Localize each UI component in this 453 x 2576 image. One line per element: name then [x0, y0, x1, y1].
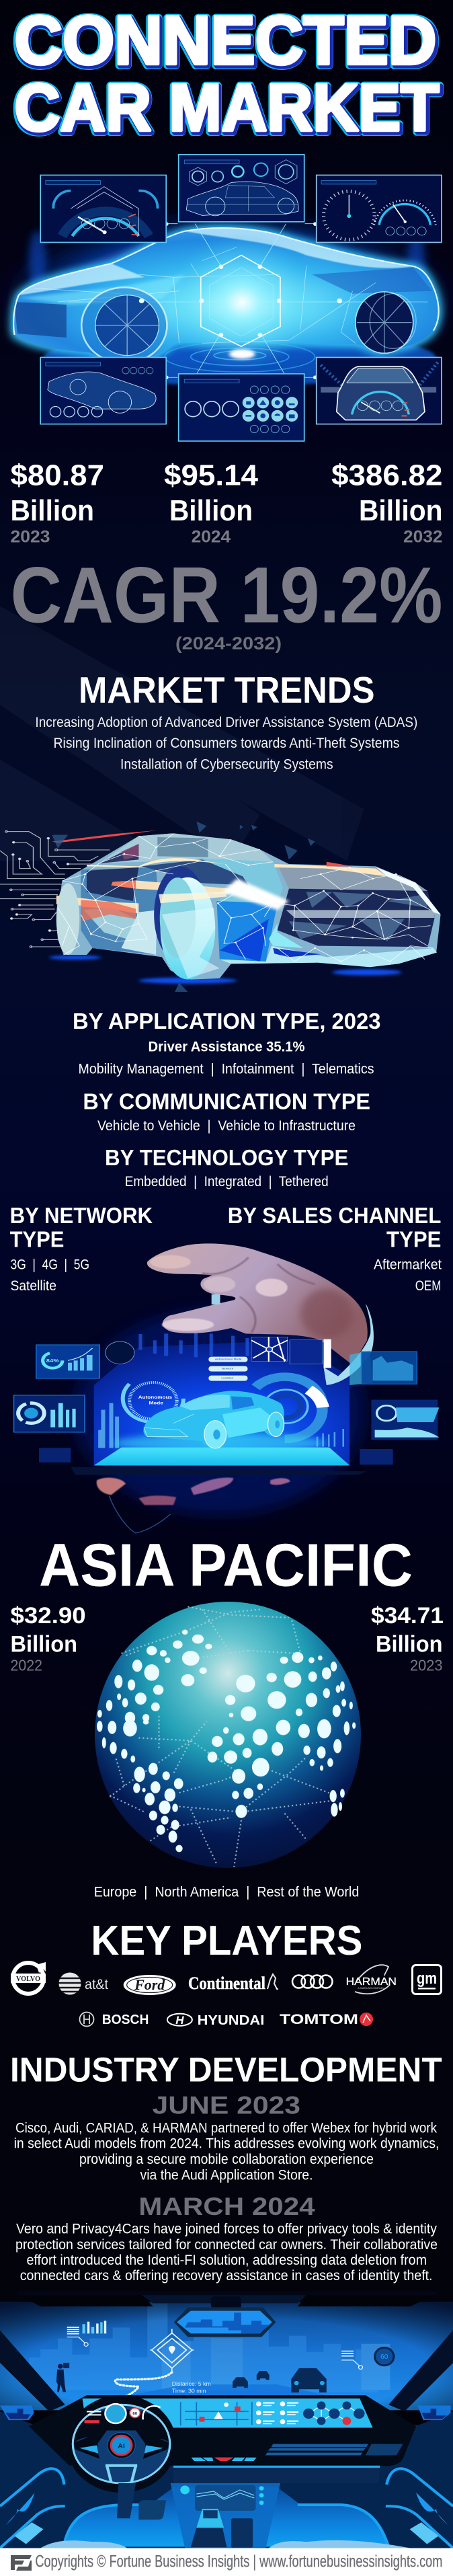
stat 2024: Billion: [169, 494, 253, 527]
segment: sales channel type: [228, 1203, 442, 1294]
car body: [56, 833, 441, 980]
hero blue glow: [0, 206, 453, 393]
small dim tiles: [39, 1448, 393, 1465]
panel: gauges top right: [317, 175, 442, 242]
Asia Pacific 2022 value: [11, 1603, 86, 1674]
segment: application type: [73, 1009, 380, 1077]
stray triangles: [52, 822, 315, 992]
bars on screen: [98, 1403, 344, 1448]
connector lines and nodes: [139, 222, 342, 379]
road: [64, 2384, 387, 2409]
bars behind hand: [138, 1333, 249, 1357]
HUD graphic: chart and note: [67, 2321, 106, 2346]
logo: Hyundai: HYUNDAI: [198, 2013, 264, 2028]
steering wheel: AI: [118, 2443, 125, 2450]
tablet edge: [71, 1467, 367, 1475]
logo: GM: [413, 1965, 441, 1994]
dial label second line: Mode: [149, 1401, 163, 1405]
lattice nodes: [83, 843, 410, 962]
market trends list: Rising Inclination of Consumers towards Anti-Theft Systems: [54, 735, 399, 751]
logo: Volvo: [11, 1962, 46, 1994]
map tile: [251, 1337, 331, 1368]
tablet cable: [110, 1496, 171, 1533]
market trends list: [35, 714, 417, 772]
cars ahead: [233, 2368, 327, 2392]
dial label: Autonomous: [138, 1395, 172, 1400]
segment: network type: Satellite: [11, 1278, 56, 1294]
segment: application type: Driver Assistance 35.1%: [148, 1039, 305, 1055]
stat 2023: [11, 459, 104, 546]
segment: network type: TYPE: [10, 1227, 64, 1252]
segment: communication type: [83, 1089, 370, 1134]
title line 2: CAR MARKET: CAR MARKET: [15, 70, 440, 145]
hologram front wheel: [81, 287, 167, 364]
segment: application type: Mobility Management | Infotainment | Telematics: [78, 1060, 374, 1077]
Asia Pacific 2023 value: [371, 1603, 444, 1674]
heading: industry development: INDUSTRY DEVELOPMENT: [10, 2051, 442, 2089]
segment: technology type: Embedded | Integrated | Tethered: [125, 1173, 329, 1189]
logo: GM: gm: [417, 1969, 437, 1988]
logo: Continental: Continental: [188, 1974, 265, 1993]
CAGR period: (2024-2032): [175, 633, 282, 654]
lower trim: [173, 2466, 380, 2483]
panel: car wireframe top centre: [179, 155, 304, 222]
logo: Ford: Ford: [134, 1976, 165, 1993]
hero illustration: holographic car with dashboards: [0, 155, 453, 441]
date: March 2024: MARCH 2024: [138, 2193, 315, 2220]
segment: network type: [10, 1203, 153, 1294]
floating card: lower right: [371, 1400, 439, 1440]
title line 2: CAR MARKET: CAR MARKET: [15, 72, 442, 147]
market trends list: Installation of Cybersecurity Systems: [120, 756, 333, 772]
floating card: top left: [36, 1345, 99, 1378]
HUD graphic: location pin: [115, 2329, 194, 2398]
floor ripple: [43, 331, 436, 386]
logo: AT&T: at&t: [85, 1977, 108, 1992]
stat 2024: $95.14: [164, 459, 259, 492]
lower fingers: [97, 1478, 290, 1505]
HUD speed sign: 60: [380, 2354, 388, 2361]
HUD route text: [172, 2380, 211, 2394]
segment: technology type: [105, 1145, 348, 1189]
front wheel: [154, 866, 226, 980]
lower cabin: [0, 2411, 453, 2548]
lower cabin glow: [64, 2487, 388, 2547]
panel: car wireframe bottom left: [40, 357, 166, 424]
panel: speedometer left: [40, 175, 166, 242]
segment: sales channel type: BY SALES CHANNEL: [228, 1203, 441, 1228]
wire lines across the hologram: [35, 247, 427, 343]
segment: technology type: BY TECHNOLOGY TYPE: [105, 1145, 348, 1170]
date: June 2023: JUNE 2023: [152, 2092, 300, 2119]
roof trim: [20, 2295, 434, 2306]
segment: network type: 3G | 4G | 5G: [11, 1256, 89, 1272]
door accents: [6, 2493, 448, 2525]
logo: Hyundai: [167, 2013, 264, 2028]
stat 2023: $80.87: [11, 459, 104, 492]
Asia Pacific 2023 value: 2023: [410, 1657, 442, 1674]
heading: market trends: MARKET TRENDS: [79, 669, 375, 711]
car on screen: [143, 1391, 284, 1448]
title line 1: CONNECTED: CONNECTED: [15, 3, 438, 80]
development text: June 2023: via the Audi Application Store.: [140, 2167, 313, 2183]
dashboard: [29, 2395, 416, 2466]
title line 1: CONNECTED: CONNECTED: [15, 4, 439, 81]
segment: sales channel type: OEM: [415, 1278, 441, 1294]
centre stack: [117, 2483, 280, 2548]
floating card: lower left: [14, 1395, 85, 1432]
steering wheel: 60: [132, 2412, 137, 2416]
market size stats: [11, 459, 442, 546]
globe dots lower: [97, 1719, 356, 1852]
steering wheel: [67, 2395, 176, 2493]
stat 2023: Billion: [11, 494, 94, 527]
stat 2032: [331, 459, 442, 546]
title line 2: CAR MARKET: CAR MARKET: [15, 71, 441, 146]
screen menu pills: [208, 1357, 247, 1381]
light streaks on car: [52, 830, 441, 914]
shirt cuff: [323, 1303, 374, 1385]
footer logo: [11, 2555, 32, 2571]
footer bar: [0, 2548, 453, 2576]
console vents: [192, 2444, 403, 2461]
gauge widget: [106, 1341, 134, 1364]
screen menu pills: Autonomous Mode: [215, 1358, 242, 1361]
Asia Pacific 2022 value: $32.90: [11, 1603, 86, 1629]
background diagonal stripes and triangles: [0, 606, 364, 861]
HUD speed sign: [341, 2347, 394, 2370]
stat 2024: 2024: [192, 527, 231, 546]
globe: [95, 1602, 361, 1868]
panel: icon grid bottom centre: [179, 374, 304, 441]
floor glow: [49, 955, 402, 984]
Asia Pacific 2023 value: Billion: [376, 1632, 442, 1657]
title line 1: CONNECTED: CONNECTED: [15, 2, 437, 79]
polygon lattice: [58, 834, 434, 962]
development text: June 2023: providing a secure mobile collaboration experience: [79, 2151, 374, 2167]
seat tops: [40, 2540, 410, 2548]
stat 2032: 2032: [403, 527, 442, 546]
stat 2032: Billion: [359, 494, 442, 527]
segment: network type: BY NETWORK: [10, 1203, 153, 1228]
logo: Bosch: BOSCH: [102, 2013, 149, 2027]
Asia Pacific 2022 value: Billion: [11, 1632, 77, 1657]
floating card: top right: [361, 1352, 417, 1384]
development text: March 2024: effort introduced the Identi-FI solution, addressing data deletion from: [27, 2252, 427, 2268]
stat 2024: [164, 459, 259, 546]
hologram car body: [13, 228, 439, 361]
segment: sales channel type: Aftermarket: [374, 1256, 442, 1272]
circuit traces: [0, 830, 110, 947]
floating card: top left: 84%: [46, 1358, 59, 1364]
segment: application type: BY APPLICATION TYPE, 2023: [73, 1009, 380, 1033]
car interior illustration: [0, 2291, 453, 2548]
development text: June 2023: [14, 2119, 439, 2183]
hand and tablet illustration: [14, 1243, 439, 1533]
title: [15, 2, 442, 147]
logo: Audi rings: [292, 1976, 332, 1988]
stat 2032: $386.82: [331, 459, 442, 492]
A pillars: [0, 2331, 453, 2411]
globe dots upper: [97, 1630, 353, 1724]
central hexagon core: [170, 233, 315, 370]
key player logos: [11, 1962, 441, 2028]
dashboard screen: [83, 2398, 373, 2427]
windscreen vignette: [0, 2302, 453, 2410]
logo: Hyundai: H: [175, 2014, 184, 2027]
pedestrian and alert: [56, 2363, 69, 2392]
other regions list: Europe | North America | Rest of the World: [94, 1883, 359, 1900]
logo: Harman: HARMAN: [346, 1976, 397, 1988]
city skyline: [29, 2303, 390, 2392]
windscreen: [0, 2302, 453, 2410]
cyan floor: [94, 1448, 349, 1465]
hologram rear wheel: [356, 292, 416, 353]
logo: AT&T: [58, 1973, 108, 1994]
segment: communication type: Vehicle to Vehicle | Vehicle to Infrastructure: [97, 1118, 356, 1134]
logo: Ford: [124, 1976, 175, 1994]
door panels: [0, 2468, 453, 2548]
HUD route text: Distance: 5 km: [172, 2380, 211, 2387]
stat 2023: 2023: [11, 527, 50, 546]
Asia Pacific 2023 value: $34.71: [371, 1603, 444, 1629]
logo: Harman: [346, 1965, 397, 1994]
logo: TomTom: [280, 2012, 373, 2027]
heading: key players: KEY PLAYERS: [91, 1918, 362, 1964]
logo: Harman: A SAMSUNG COMPANY: [358, 1987, 384, 1990]
side mirrors: [0, 2405, 451, 2420]
globe network lines: [110, 1606, 332, 1867]
Asia Pacific 2022 value: 2022: [11, 1657, 42, 1674]
rear-view mirror: [174, 2296, 276, 2337]
dials on screen: [123, 1375, 323, 1439]
logo: Volvo: VOLVO: [16, 1976, 40, 1983]
hand: [147, 1243, 368, 1365]
panel: car front bottom right: [317, 357, 442, 424]
logo: TomTom: TOMTOM: [280, 2012, 358, 2027]
heading: Asia Pacific: ASIA PACIFIC: [39, 1532, 413, 1599]
segment: sales channel type: TYPE: [386, 1227, 441, 1252]
segment: communication type: BY COMMUNICATION TYPE: [83, 1089, 370, 1114]
tablet screen: [94, 1340, 349, 1466]
development text: March 2024: [15, 2220, 438, 2284]
low-poly car illustration: [0, 822, 441, 992]
rear of car: [56, 883, 79, 955]
HUD route text: Time: 30 min: [172, 2388, 206, 2394]
hand glow backdrop: [75, 1309, 364, 1515]
logo: Bosch: [79, 2012, 149, 2027]
screen menu pills: Network: [222, 1367, 234, 1370]
screen menu pills: Location: [221, 1376, 234, 1380]
